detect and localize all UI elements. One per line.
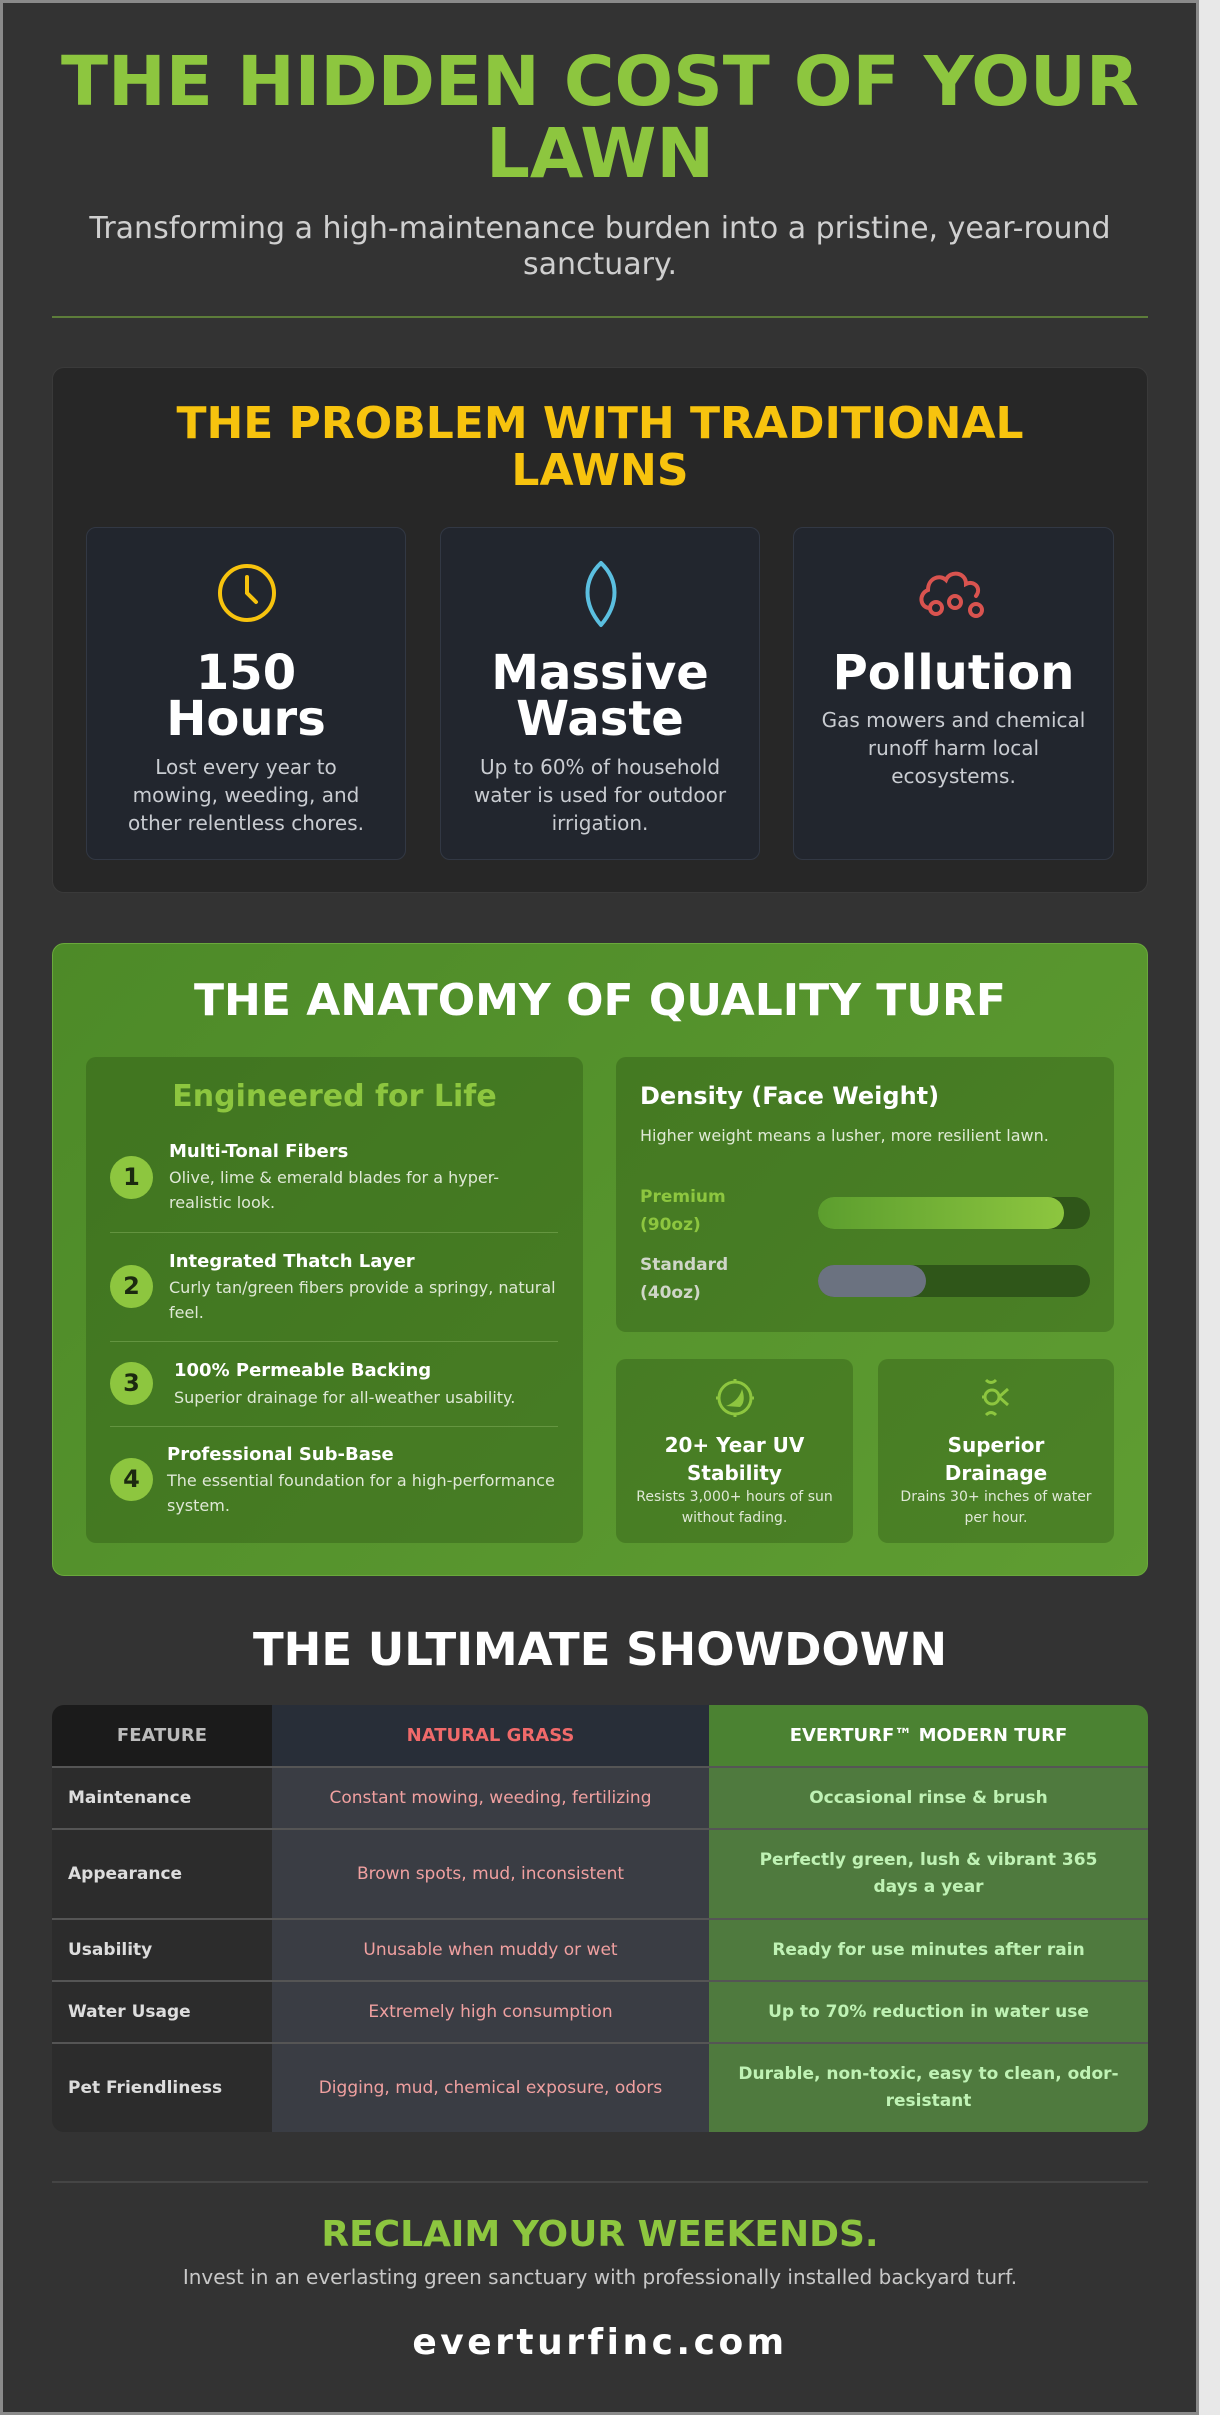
comparison table: Maintenance: [68, 1788, 191, 1808]
card: pollution: [793, 527, 1114, 860]
item 3: [110, 1360, 515, 1407]
item 1: Olive, lime & emerald blades for a hyper-realistic look.: [169, 1168, 499, 1212]
card: density chart: [616, 1057, 1114, 1332]
item 1: 1: [123, 1163, 140, 1191]
comparison table: FEATURE: [117, 1725, 207, 1746]
comparison table: Usability: [68, 1940, 152, 1960]
item 4: [110, 1444, 555, 1515]
comparison table: Occasional rinse & brush: [809, 1788, 1048, 1808]
item 2: Curly tan/green fibers provide a springy, natural feel.: [169, 1278, 556, 1322]
stat: [491, 645, 709, 747]
comparison table: Durable, non-toxic, easy to clean, odor-resistant: [738, 2064, 1119, 2111]
desc: Gas mowers and chemical runoff harm local ecosystems.: [822, 708, 1085, 788]
item 4: Professional Sub-Base: [167, 1444, 394, 1465]
stat: Pollution: [833, 645, 1074, 701]
item 4: 4: [123, 1465, 140, 1493]
problem heading: THE PROBLEM WITH TRADITIONAL LAWNS: [176, 398, 1024, 496]
item 1: [110, 1141, 499, 1212]
comparison table: Brown spots, mud, inconsistent: [357, 1864, 624, 1884]
comparison table: Appearance: [68, 1864, 182, 1884]
comparison table: Pet Friendliness: [68, 2078, 222, 2098]
comparison table: NATURAL GRASS: [407, 1725, 574, 1746]
card: hours: [86, 527, 406, 860]
icon: pollution: [919, 572, 984, 618]
bar: standard: (40oz): [640, 1283, 701, 1303]
comparison table: Unusable when muddy or wet: [363, 1940, 618, 1960]
stat: Hours: [166, 691, 326, 747]
item 4: The essential foundation for a high-performance system.: [167, 1471, 555, 1515]
card: density chart: Density (Face Weight): [640, 1082, 939, 1110]
icon: drainage: [982, 1379, 1009, 1416]
bar: premium: [640, 1187, 1090, 1235]
subtitle: Transforming a high-maintenance burden into a pristine, year-round sanctuary.: [89, 211, 1111, 282]
icon: clock: [218, 564, 276, 622]
comparison table: Digging, mud, chemical exposure, odors: [319, 2078, 662, 2098]
stat: [166, 645, 326, 747]
item 2: 2: [123, 1272, 140, 1300]
item 3: 3: [123, 1369, 140, 1397]
card: UV: 20+ Year UV: [665, 1433, 804, 1457]
stat: Massive: [491, 645, 709, 701]
card: engineered: [86, 1057, 583, 1543]
footer text: Invest in an everlasting green sanctuary with professionally installed backyard turf.: [183, 2265, 1017, 2289]
comparison table: Up to 70% reduction in water use: [768, 2002, 1089, 2022]
card: UV: Resists 3,000+ hours of sun without fading.: [636, 1489, 833, 1526]
item 3: Superior drainage for all-weather usability.: [174, 1388, 515, 1407]
comparison table: Water Usage: [68, 2002, 191, 2022]
comparison table: Extremely high consumption: [368, 2002, 613, 2022]
bar: premium: Premium: [640, 1187, 726, 1207]
title: THE HIDDEN COST OF YOUR LAWN: [61, 42, 1139, 194]
anatomy heading: THE ANATOMY OF QUALITY TURF: [194, 975, 1006, 1026]
item 3: 100% Permeable Backing: [174, 1360, 431, 1381]
comparison table: Perfectly green, lush & vibrant 365 days a year: [760, 1850, 1097, 1897]
bar: premium: (90oz): [640, 1215, 701, 1235]
stat: 150: [196, 645, 296, 701]
card: density chart: Higher weight means a lusher, more resilient lawn.: [640, 1126, 1049, 1145]
desc: Lost every year to mowing, weeding, and other relentless chores.: [128, 755, 364, 835]
item 2: Integrated Thatch Layer: [169, 1251, 415, 1272]
item 2: [110, 1251, 556, 1322]
showdown heading: THE ULTIMATE SHOWDOWN: [253, 1623, 947, 1676]
stat: Waste: [516, 691, 684, 747]
desc: Up to 60% of household water is used for outdoor irrigation.: [474, 755, 726, 835]
engineered heading: Engineered for Life: [172, 1079, 497, 1114]
card: drainage: Superior: [948, 1433, 1044, 1457]
bar: standard: Standard: [640, 1255, 728, 1275]
item 1: Multi-Tonal Fibers: [169, 1141, 348, 1162]
icon: UV: [716, 1379, 754, 1417]
card: waste: [440, 527, 760, 860]
comparison table: EVERTURF™ MODERN TURF: [790, 1725, 1067, 1746]
card: drainage: Drainage: [945, 1461, 1047, 1485]
card: drainage: [878, 1359, 1114, 1543]
bar: standard: [640, 1255, 1090, 1303]
comparison table: [52, 1705, 1148, 2132]
panel: problem: [52, 367, 1148, 893]
website: everturfinc.com: [412, 2322, 788, 2363]
panel: anatomy: [52, 943, 1148, 1576]
card: UV: [616, 1359, 853, 1543]
card: drainage: Drains 30+ inches of water per hour.: [900, 1489, 1092, 1526]
icon: drop: [586, 560, 616, 628]
comparison table: Ready for use minutes after rain: [772, 1940, 1085, 1960]
comparison table: Constant mowing, weeding, fertilizing: [330, 1788, 651, 1808]
card: UV: Stability: [687, 1461, 782, 1485]
footer CTA heading: RECLAIM YOUR WEEKENDS.: [321, 2214, 879, 2255]
